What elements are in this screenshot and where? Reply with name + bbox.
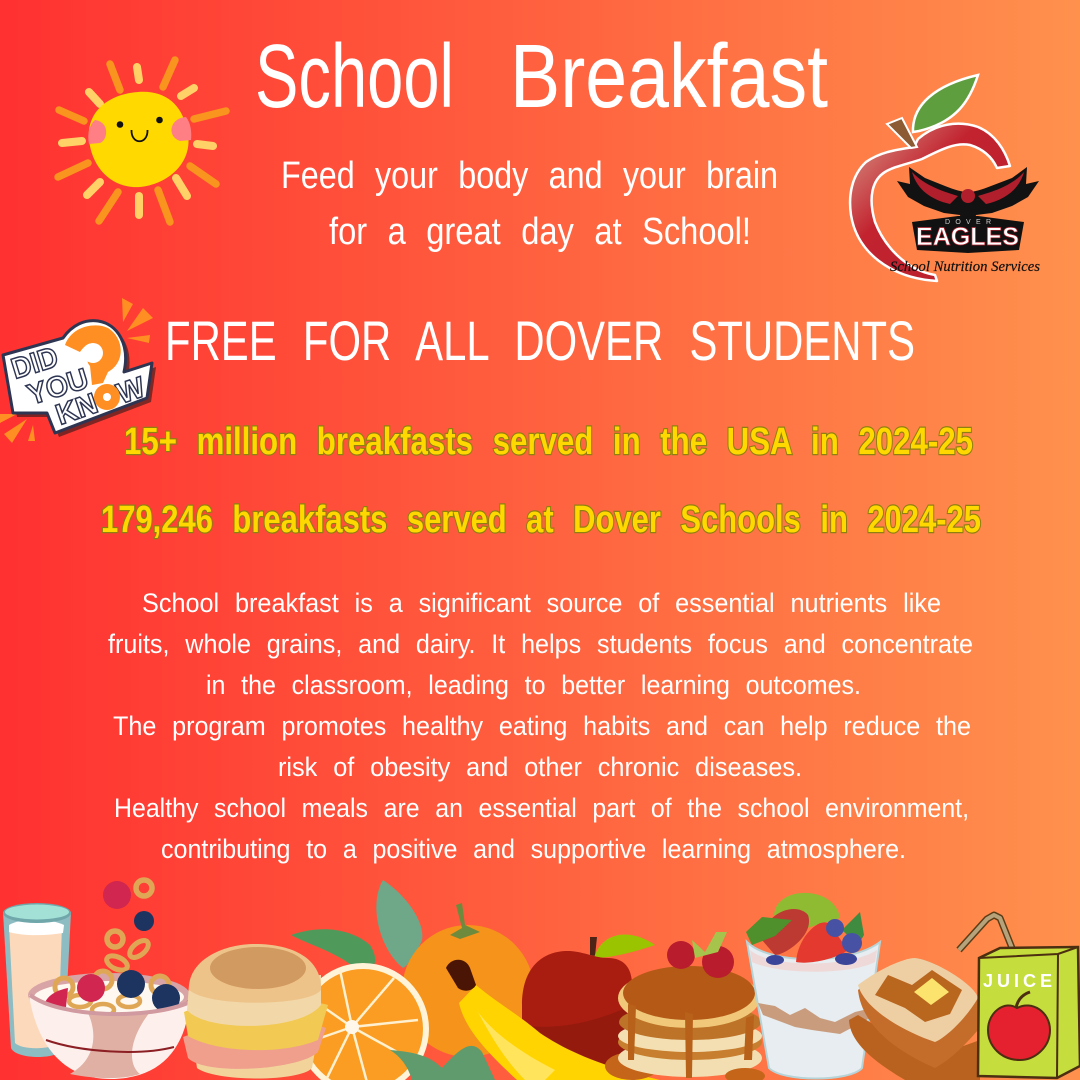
body text: Healthy school meals are an essential part of the school environment, [114, 793, 969, 823]
body text: fruits, whole grains, and dairy. It helps students focus and concentrate [108, 629, 973, 659]
icon: apple leaf [913, 75, 978, 132]
body text: in the classroom, leading to better learning outcomes. [206, 670, 861, 700]
body text [108, 588, 973, 864]
icon: juice box: JUICE [983, 971, 1052, 991]
icon: leaf under banana [390, 1046, 495, 1080]
icon: yogurt parfait [746, 893, 880, 1078]
subtitle [281, 155, 778, 253]
icon: leaves [291, 880, 422, 968]
icon: apple [522, 935, 655, 1065]
logo caption: School Nutrition Services [890, 259, 1040, 275]
icon: did you know badge: YOU [24, 363, 92, 412]
icon: pancakes with syrup [605, 932, 765, 1080]
icon: apple ring [850, 124, 1010, 281]
icon: glass of milk [3, 903, 71, 1057]
icon: whole orange [402, 903, 534, 1057]
title: Breakfast [510, 27, 828, 127]
subtitle: for a great day at School! [329, 211, 751, 253]
icon: orange slice [297, 963, 429, 1080]
body text: contributing to a positive and supportive learning atmosphere. [161, 834, 906, 864]
icon: eagle: DOVER [945, 219, 991, 226]
icon: eagle [897, 167, 1039, 253]
icon: juice box [959, 915, 1080, 1078]
icon: breakfast muffin sandwich [183, 944, 328, 1078]
body text: risk of obesity and other chronic diseases. [278, 752, 802, 782]
icon: apple stem [887, 118, 917, 148]
icon: did you know badge: DID [8, 341, 62, 386]
body text: School breakfast is a significant source of essential nutrients like [142, 588, 941, 618]
icon: did you know badge: KNOW [52, 371, 150, 432]
icon: falling cereal and berries [103, 880, 154, 973]
title [255, 27, 828, 127]
icon: cereal bowl [28, 970, 190, 1079]
icon: did you know badge [0, 298, 156, 443]
stats [101, 421, 981, 541]
food illustration strip [3, 880, 1080, 1080]
title: School [255, 27, 454, 127]
subtitle: Feed your body and your brain [281, 155, 778, 197]
body text: The program promotes healthy eating habits and can help reduce the [113, 711, 971, 741]
icon: french toast with butter [849, 958, 980, 1080]
logo: Dover Eagles School Nutrition Services apple [850, 75, 1040, 281]
icon: eagle: EAGLES [916, 223, 1019, 251]
icon: banana [446, 960, 660, 1080]
icon: smiling sun [58, 60, 226, 222]
